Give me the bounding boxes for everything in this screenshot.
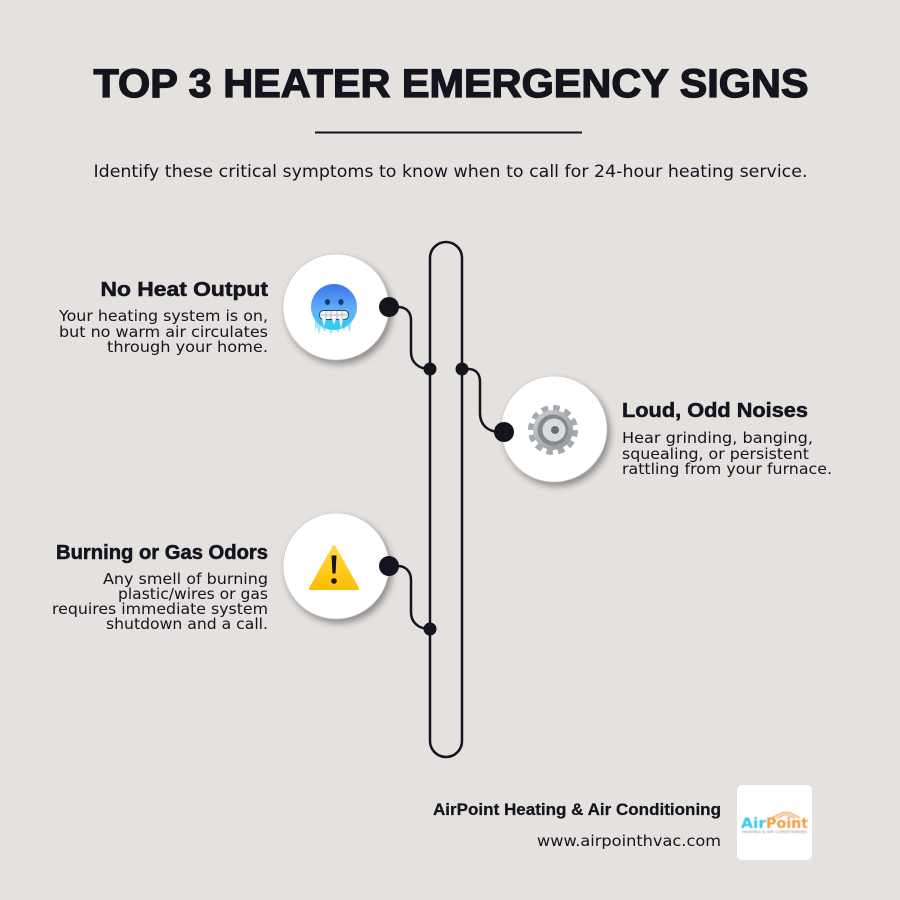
text block: burning or gas odors: shutdown and a call. <box>106 616 268 633</box>
text block: loud odd noises <box>622 430 832 478</box>
icon circle: warning sign <box>283 513 389 619</box>
heading: loud odd noises: Loud, Odd Noises <box>622 399 808 422</box>
text block: no heat output: but no warm air circulates <box>59 324 268 341</box>
icon circle: freezing face <box>283 254 389 360</box>
text block: no heat output: Your heating system is on, <box>58 308 268 325</box>
icon circle: gear <box>501 376 607 482</box>
logo: Air <box>741 816 766 832</box>
footer company name: AirPoint Heating & Air Conditioning <box>433 801 721 819</box>
text block: loud odd noises: rattling from your furnace. <box>622 461 832 478</box>
text block: burning or gas odors: requires immediate system <box>52 601 268 618</box>
panel: no heat output <box>58 254 430 369</box>
heading: burning or gas odors: Burning or Gas Odors <box>56 541 268 564</box>
title: TOP 3 HEATER EMERGENCY SIGNS <box>94 62 809 106</box>
central timeline loop <box>430 242 462 757</box>
panel: burning or gas odors <box>52 513 430 633</box>
subtitle: Identify these critical symptoms to know when to call for 24-hour heating service. <box>94 162 808 182</box>
connector: no heat output <box>389 307 430 369</box>
logo: Point <box>766 816 808 832</box>
logo: HEATING & AIR CONDITIONING <box>742 830 807 834</box>
panel: loud odd noises <box>462 369 832 482</box>
footer website: www.airpointhvac.com <box>537 832 721 850</box>
text block: burning or gas odors <box>52 571 268 633</box>
connector dots <box>379 297 514 636</box>
text block: no heat output: through your home. <box>107 339 268 356</box>
connector: loud odd noises <box>462 369 504 432</box>
text block: no heat output <box>58 308 268 356</box>
connector: burning or gas odors <box>389 566 430 629</box>
text block: burning or gas odors: plastic/wires or gas <box>118 586 268 603</box>
text block: loud odd noises: squealing, or persistent <box>622 446 809 463</box>
text block: loud odd noises: Hear grinding, banging, <box>622 430 813 447</box>
heading: no heat output: No Heat Output <box>100 278 268 301</box>
text block: burning or gas odors: Any smell of burning <box>103 571 268 588</box>
logo <box>737 785 812 860</box>
